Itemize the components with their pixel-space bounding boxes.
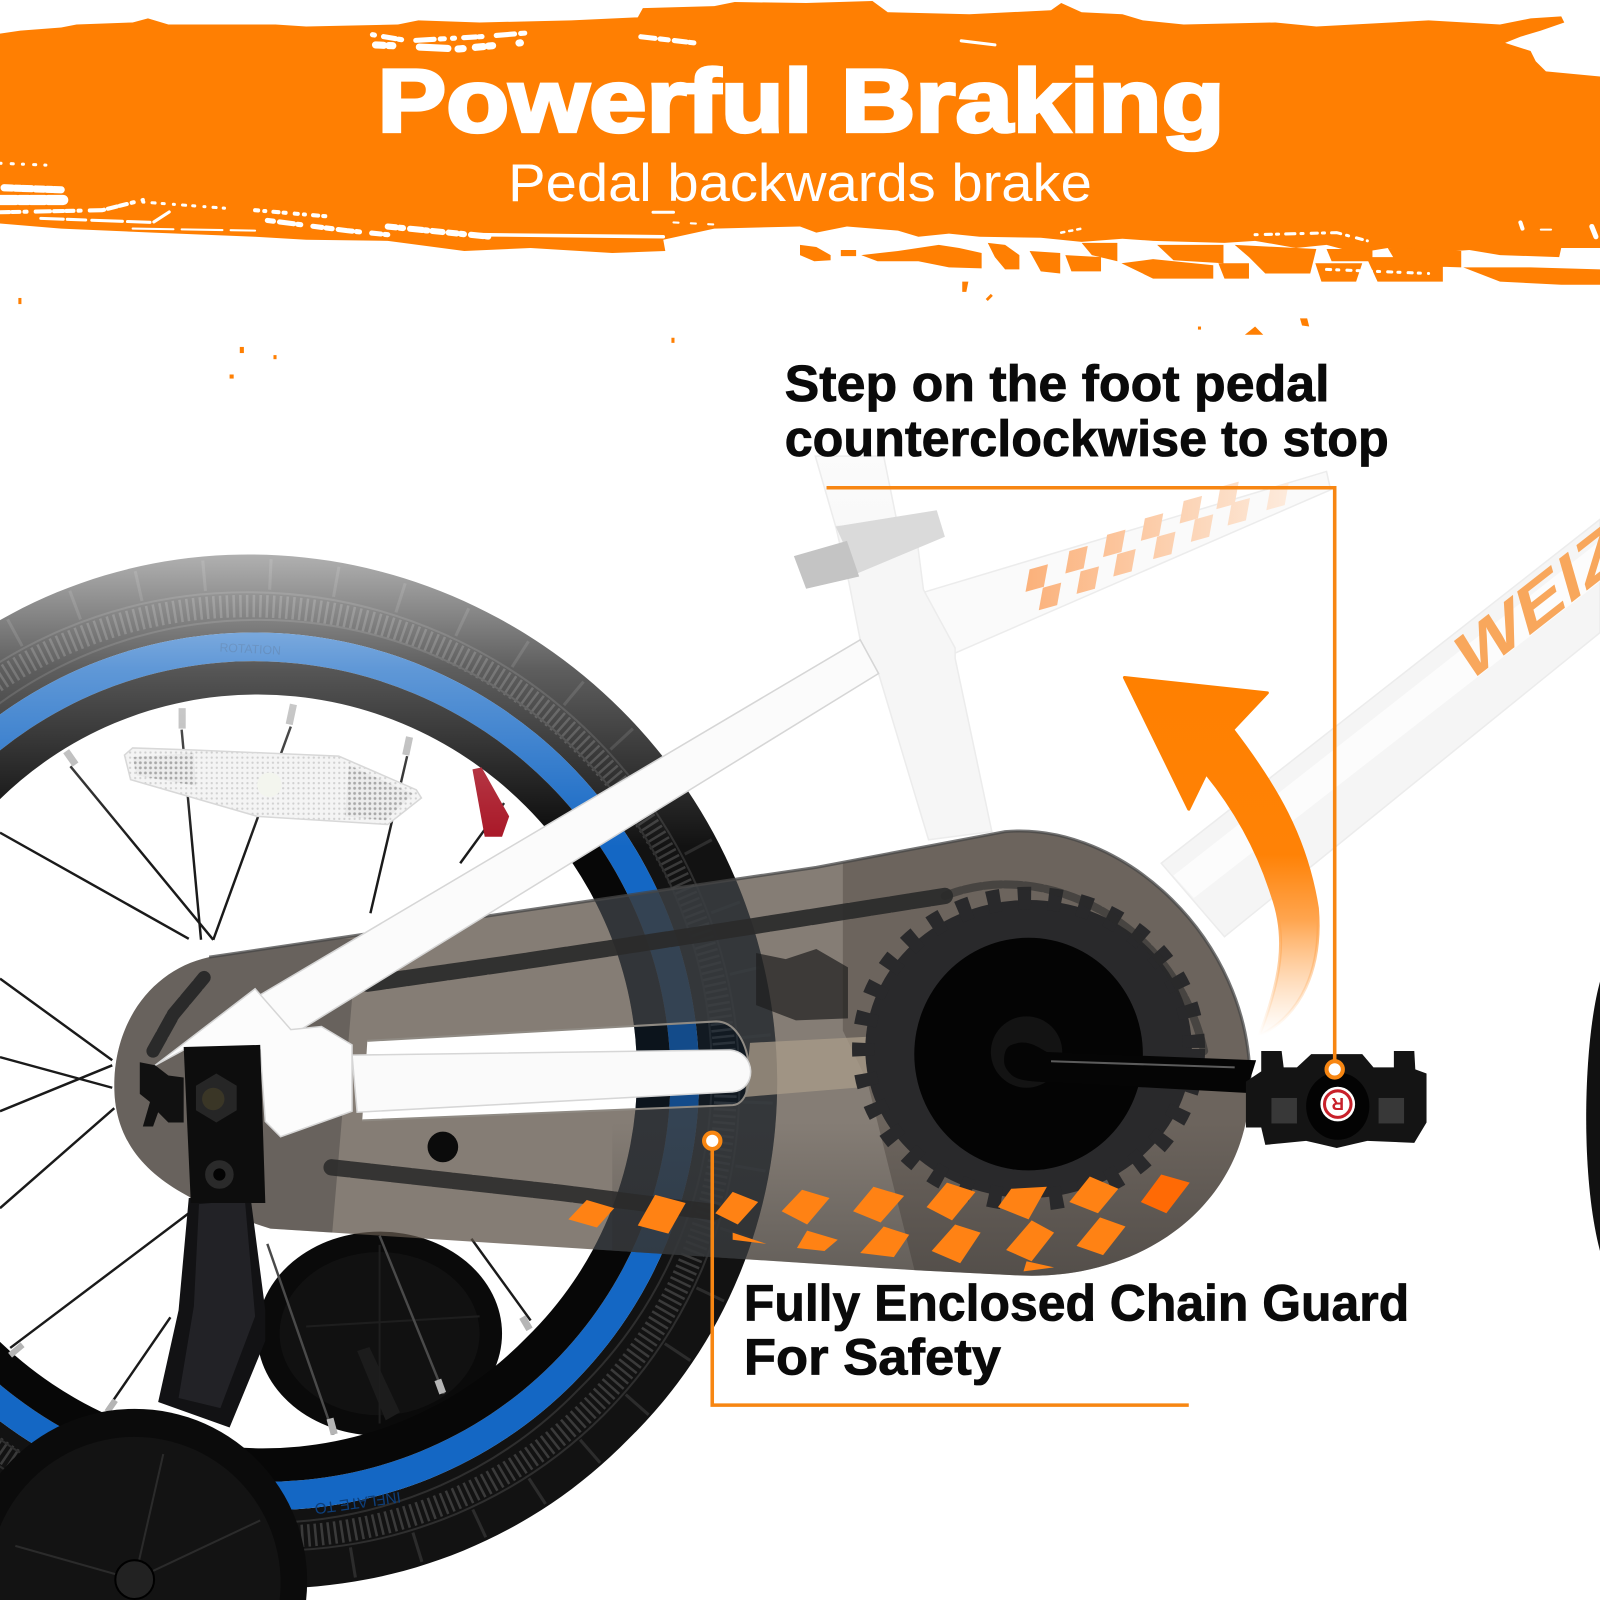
callout text: Step on the foot pedal xyxy=(785,355,1330,412)
brand lettering: WEIZ xyxy=(1450,505,1600,699)
white speckles xyxy=(0,33,1596,273)
lower brush fragments xyxy=(800,243,1600,285)
axle nut xyxy=(196,1073,237,1122)
sidewall lettering: inflate: INFLATE TO xyxy=(313,1488,402,1517)
curved arrow xyxy=(1124,678,1318,1036)
sprocket xyxy=(863,898,1194,1200)
upper frame: seat tube and top tube xyxy=(815,456,1600,937)
blue sidewall band xyxy=(0,633,699,1510)
leader line xyxy=(712,1141,1189,1405)
callout text: Fully Enclosed Chain Guard xyxy=(744,1274,1409,1331)
lower shadow xyxy=(612,1159,1227,1276)
seat post xyxy=(815,456,898,527)
dropout lug xyxy=(155,989,352,1137)
top tube xyxy=(908,471,1331,653)
orange checker decals xyxy=(568,1174,1190,1271)
tire reflection xyxy=(756,949,848,1020)
spokes xyxy=(0,727,531,1435)
tread blocks xyxy=(0,574,758,1569)
callout: stop instruction xyxy=(785,355,1389,1078)
guard shading through clip xyxy=(114,832,1248,1276)
callout text: For Safety xyxy=(744,1328,1002,1385)
dark front section xyxy=(843,816,1265,1286)
chain xyxy=(153,884,1204,1212)
chain stay xyxy=(352,1050,751,1112)
tread lugs xyxy=(0,606,726,1537)
axle plate xyxy=(140,1062,184,1127)
leader line xyxy=(827,488,1335,1069)
front training wheel xyxy=(0,1409,307,1600)
chain guard xyxy=(114,830,1252,1276)
title: Powerful Braking xyxy=(378,52,1224,151)
rear training wheel xyxy=(257,1232,502,1436)
red rear brake part xyxy=(472,767,509,837)
front tire edge xyxy=(1586,982,1600,1251)
seat stay and chain stay xyxy=(155,640,879,1137)
loose paint flecks xyxy=(18,282,1309,379)
spoke nipples xyxy=(8,704,533,1435)
beige strip xyxy=(745,1037,867,1097)
banner: orange brush stroke xyxy=(0,1,1600,379)
top tube checker decal xyxy=(1026,482,1289,610)
marker dot xyxy=(704,1133,720,1149)
rear bicycle wheel xyxy=(0,554,777,1588)
pedal logo xyxy=(1320,1087,1355,1121)
pedal logo: R xyxy=(1331,1094,1344,1114)
dark rear section xyxy=(102,939,357,1240)
seat stay xyxy=(260,640,879,1036)
crank arm xyxy=(991,1016,1256,1093)
tire xyxy=(0,554,777,1588)
marker dot xyxy=(1327,1061,1343,1078)
black rim xyxy=(0,661,670,1482)
sprocket inner disc xyxy=(914,938,1143,1170)
bike photo illustration xyxy=(0,456,1600,1600)
subtitle: Pedal backwards brake xyxy=(508,154,1092,213)
seat clamp collar xyxy=(794,510,945,589)
training wheel bracket xyxy=(158,1045,265,1428)
guard screw xyxy=(428,1132,458,1162)
callout text: counterclockwise to stop xyxy=(785,410,1389,467)
reflector xyxy=(124,748,421,824)
seat tube xyxy=(836,527,992,840)
callout: chain guard xyxy=(704,1133,1409,1405)
down tube xyxy=(1161,519,1600,937)
solid brush body xyxy=(0,1,1600,257)
tire fade overlay xyxy=(0,551,796,847)
pedal xyxy=(1246,1051,1427,1148)
sidewall lettering: rotation: ROTATION xyxy=(219,640,281,658)
tire seen through guard xyxy=(593,880,777,1260)
